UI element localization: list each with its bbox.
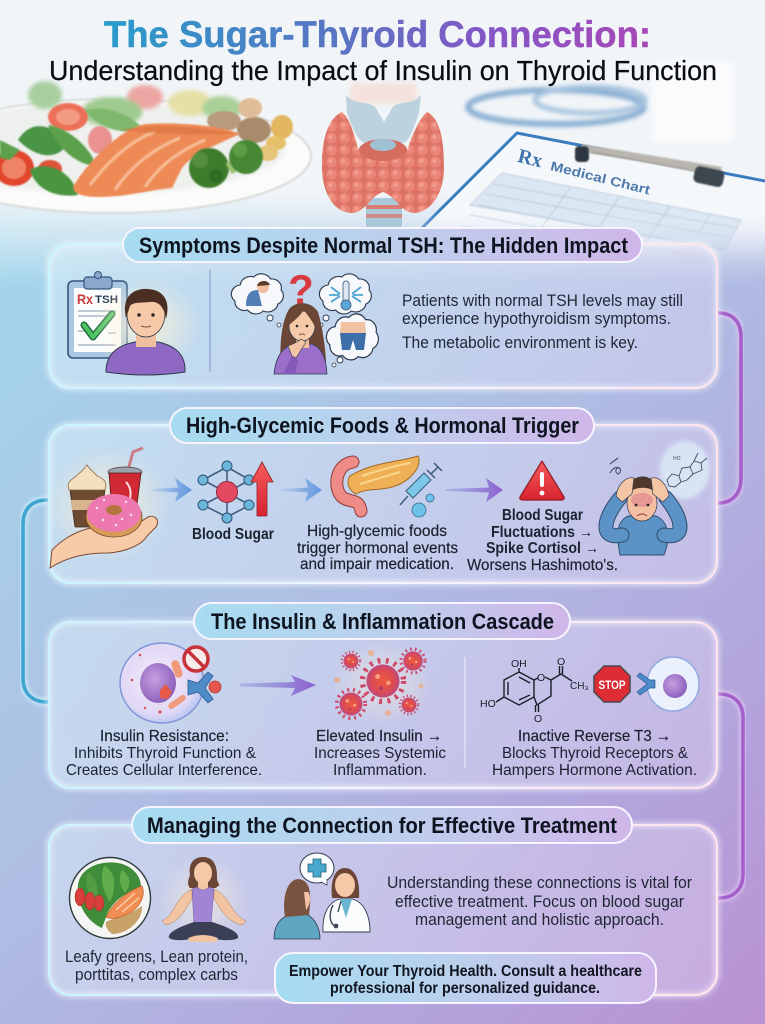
icon: reverse T3 chemical structure: OH <box>511 658 527 670</box>
label: reverse T3: Hampers Hormone Activation. <box>492 762 697 779</box>
icon: thought cloud weight <box>326 314 378 367</box>
soda cup <box>108 448 143 512</box>
icon: TSH clipboard: Rx <box>77 291 93 307</box>
icon: reverse T3 chemical structure: HO <box>480 698 496 710</box>
label: blood sugar: Blood Sugar <box>192 526 274 543</box>
chart: Rx and title: Medical Chart <box>549 158 652 198</box>
panel 1 body text: The metabolic environment is key. <box>402 333 638 352</box>
label: cortisol chain: Fluctuations → <box>491 524 593 541</box>
label: reverse T3: Inactive Reverse T3 → <box>518 728 671 745</box>
arrow: blood sugar to pancreas <box>282 478 322 502</box>
panel 3 heading pill: The Insulin & Inflammation Cascade <box>211 609 554 634</box>
hair <box>628 476 657 493</box>
panel 4 body text: effective treatment. Focus on blood sugar <box>395 892 684 911</box>
thyroid: cartilage <box>346 95 421 143</box>
label: glycemic foods: High-glycemic foods <box>307 523 447 540</box>
label: glycemic foods <box>297 523 458 573</box>
icon: healthy plate <box>70 858 150 938</box>
label: cortisol chain <box>467 507 618 574</box>
arrow: pancreas to warning <box>446 478 503 502</box>
label: reverse T3: Blocks Thyroid Receptors & <box>502 745 688 762</box>
chat bubble <box>300 853 334 885</box>
plate: tomatoes <box>0 103 112 186</box>
panel 1: symptoms despite normal TSH <box>49 228 717 388</box>
icon: pancreas <box>337 456 419 511</box>
title line 1: The Sugar-Thyroid Connection: <box>104 14 651 55</box>
thyroid: lobes <box>322 112 444 213</box>
panel 1 body text <box>402 291 683 352</box>
label: glycemic foods: trigger hormonal events <box>297 540 458 557</box>
photo: medical chart clipboard <box>421 131 765 252</box>
call to action pill: Empower Your Thyroid Health. Consult a healthcare <box>289 963 642 980</box>
label: reverse T3 <box>492 728 697 779</box>
connector: panel 1 to panel 2 <box>717 313 741 503</box>
thyroid: trachea <box>366 198 402 228</box>
label: diet list: porttitas, complex carbs <box>75 965 238 984</box>
photo: blurred stethoscope <box>468 87 645 124</box>
connector: panel 3 to panel 4 <box>717 694 743 898</box>
panel 3: insulin and inflammation cascade <box>49 603 717 788</box>
chart: Rx and title: Rx <box>516 145 545 172</box>
icon: reverse T3 chemical structure: CH₃ <box>570 681 589 692</box>
icon: blocked receptor cell <box>637 657 699 711</box>
panel 1 heading pill: Symptoms Despite Normal TSH: The Hidden Impact <box>139 233 629 258</box>
icon: glucose molecule <box>198 461 254 523</box>
label: elevated insulin: Elevated Insulin → <box>316 728 442 745</box>
label: insulin resistance: Creates Cellular Interference. <box>66 762 262 779</box>
label: insulin resistance: Inhibits Thyroid Function & <box>74 745 256 762</box>
patient <box>274 879 320 939</box>
donut <box>86 494 142 537</box>
icon: hormone bubble: HO <box>673 456 681 462</box>
photo: thyroid gland <box>322 83 444 228</box>
icon: warning triangle <box>520 461 564 500</box>
chart: Rx and title <box>517 149 650 194</box>
icon: blocked receptor <box>188 672 221 703</box>
photo: food plate <box>0 81 311 213</box>
icon: reverse T3 chemical structure: O <box>537 672 545 684</box>
plate: nuts and chickpeas <box>207 98 293 161</box>
label: diet list <box>65 947 248 984</box>
top light fade <box>0 0 765 285</box>
icon: stop sign <box>594 666 630 702</box>
icon: inflammation viruses <box>332 641 432 725</box>
icon: stressed man <box>606 458 680 555</box>
sweater torso <box>618 516 668 555</box>
call to action pill <box>275 953 656 1003</box>
connector: panel 2 to panel 3 <box>23 500 49 702</box>
panel 4 body text <box>387 873 692 929</box>
panel 4 body text: management and holistic approach. <box>415 910 664 929</box>
panel 1 heading pill <box>123 228 642 262</box>
title line 2: Understanding the Impact of Insulin on Thyroid Function <box>49 55 717 86</box>
panel 3 card <box>49 622 717 788</box>
coffee drink <box>68 465 106 527</box>
chart: metal clip <box>575 144 725 188</box>
icon: reverse T3 chemical structure <box>480 656 589 725</box>
icon: prohibition sign <box>184 647 208 671</box>
thyroid: upper tube <box>349 83 418 104</box>
icon: hormone bubble <box>660 441 710 499</box>
icon: sugary foods in hand <box>46 447 170 568</box>
panel 2 heading pill <box>170 408 594 443</box>
photo: white bottle <box>652 60 734 143</box>
label: elevated insulin: Increases Systemic <box>314 745 446 762</box>
panel 1 body text: Patients with normal TSH levels may still <box>402 291 683 310</box>
panel 4 heading pill <box>132 807 632 843</box>
icon: meditating woman <box>157 856 249 944</box>
divider <box>464 657 466 768</box>
label: insulin resistance <box>66 728 262 779</box>
panel 1 card <box>49 244 717 388</box>
icon: stop sign: STOP <box>598 678 626 692</box>
thyroid: inner ring <box>359 139 407 161</box>
panel 1 body text: experience hypothyroidism symptoms. <box>402 309 671 328</box>
label: cortisol chain: Blood Sugar <box>502 507 583 524</box>
call to action pill: professional for personalized guidance. <box>330 980 600 997</box>
plate: blurred veg back <box>28 81 242 127</box>
label: glycemic foods: and impair medication. <box>300 556 454 573</box>
icon: reverse T3 chemical structure: O <box>557 656 565 668</box>
plate: broccoli <box>189 140 263 188</box>
plate: salmon <box>73 123 240 197</box>
doctor <box>323 868 370 932</box>
label: cortisol chain: Spike Cortisol → <box>486 540 599 557</box>
hands <box>616 478 634 502</box>
panel 4 heading pill: Managing the Connection for Effective Treatment <box>147 813 618 838</box>
panel 2 card <box>49 425 717 583</box>
title <box>49 14 717 86</box>
icon: man with normal result <box>91 277 201 375</box>
arrow: foods to blood sugar <box>152 478 192 502</box>
plate: leafy greens <box>0 109 145 196</box>
arrow: insulin to inflammation <box>240 675 316 696</box>
icon: insulin resistant cell <box>116 640 208 728</box>
icon: thought cloud fatigue <box>231 274 283 327</box>
label: elevated insulin: Inflammation. <box>333 762 427 779</box>
divider <box>209 270 211 372</box>
sweater arms <box>606 498 680 536</box>
icon: TSH clipboard: TSH <box>95 294 118 306</box>
panel 2 heading pill: High-Glycemic Foods & Hormonal Trigger <box>186 413 579 438</box>
label: diet list: Leafy greens, Lean protein, <box>65 947 248 966</box>
label: cortisol chain: Worsens Hashimoto's. <box>467 557 618 574</box>
panel 3 heading pill <box>194 603 570 639</box>
icon: question mark: ? <box>288 266 314 313</box>
icon: syringe <box>400 463 442 517</box>
panel 2: high-glycemic foods <box>46 408 717 583</box>
icon: rising arrow <box>251 462 273 516</box>
label: elevated insulin <box>314 728 446 779</box>
head <box>627 485 657 521</box>
hand <box>50 516 157 568</box>
label: insulin resistance: Insulin Resistance: <box>100 728 229 745</box>
icon: reverse T3 chemical structure: O <box>534 713 542 725</box>
icon: TSH clipboard <box>68 272 127 358</box>
panel 4 card <box>49 825 717 995</box>
panel 4 body text: Understanding these connections is vital for <box>387 873 692 892</box>
panel 4: managing the connection <box>49 807 717 1003</box>
chart: table <box>462 172 742 250</box>
icon: puzzled woman <box>274 303 327 374</box>
icon: thought cloud cold <box>319 274 371 327</box>
icon: patient and doctor <box>274 853 370 939</box>
